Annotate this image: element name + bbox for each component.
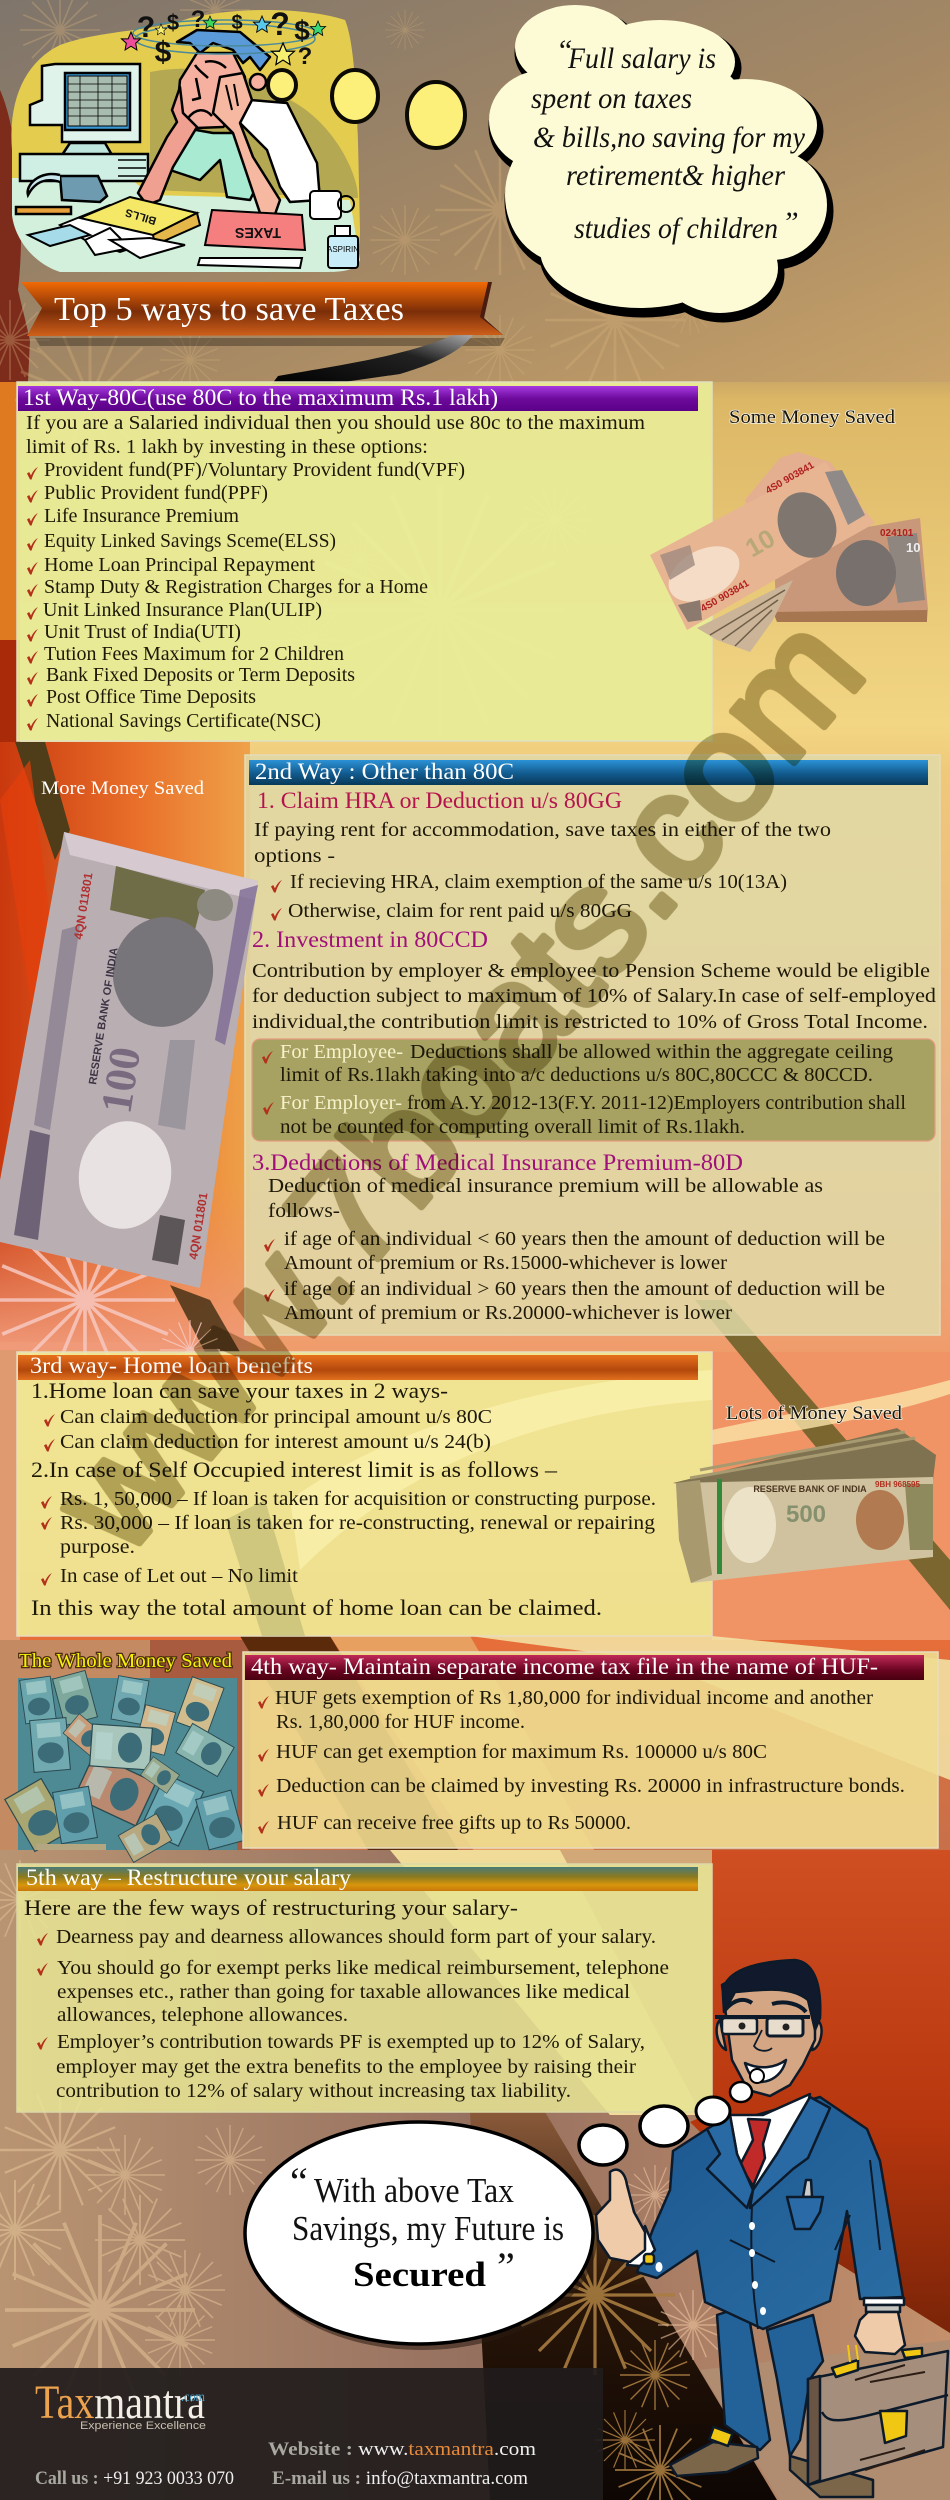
speech bubble: future is secured: Savings, my Future is (292, 2209, 564, 2248)
image: ten rupee notes: 4S0 903841 (764, 460, 817, 497)
head (717, 2020, 822, 2050)
thought cloud: spent on taxes (531, 82, 692, 115)
panel: 2nd way other than 80C: Contribution by employer & employee to Pension Scheme would be eligible (252, 960, 930, 982)
image: hundred rupee bundle: 4QN 011801 (71, 871, 96, 940)
panel: 4th way HUF: HUF can receive free gifts up to Rs 50000. (277, 1812, 631, 1834)
trousers (717, 2305, 770, 2450)
header: 4th way (245, 1655, 924, 1680)
jacket (637, 2097, 903, 2329)
title ribbon: Top 5 ways to save Taxes (54, 291, 404, 328)
speech bubble: future is secured: “ (290, 2159, 308, 2204)
panel: 1st way 80C: limit of Rs. 1 lakh by investing in these options: (26, 436, 428, 458)
thought cloud: retirement& higher (566, 159, 785, 192)
coffee mug (310, 191, 354, 219)
panel: 1st way 80C (17, 382, 712, 741)
panel: 5th way restructure salary: Here are the few ways of restructuring your salary- (24, 1895, 518, 1920)
callout: employee and employer limits (252, 1039, 935, 1141)
contact details: Call us : +91 923 0033 070 (35, 2468, 234, 2489)
logo: Taxmantra (35, 2376, 205, 2429)
taxes folder (198, 210, 305, 268)
dizzy stars and symbols: $ (167, 10, 179, 35)
bills folder: BILLS (124, 206, 158, 227)
panel: 2nd way other than 80C: 2nd Way : Other than 80C (255, 759, 514, 784)
header: 5th way (18, 1867, 698, 1891)
panel: 3rd way home loan: 2.In case of Self Occupied interest limit is as follows – (31, 1457, 558, 1482)
buttons (656, 2222, 766, 2315)
panel: 2nd way other than 80C: for deduction subject to maximum of 10% of Salary.In case of self-employed (252, 985, 936, 1007)
speech bubble: future is secured: Secured (353, 2255, 487, 2294)
panel: 1st way 80C: Unit Linked Insurance Plan(ULIP) (43, 599, 322, 621)
panel: 1st way 80C: Stamp Duty & Registration Charges for a Home (44, 576, 428, 598)
panel: 4th way HUF: Rs. 1,80,000 for HUF income. (276, 1711, 525, 1733)
speech bubbles: businessman (579, 2069, 764, 2165)
panel: 1st way 80C: National Savings Certificate(NSC) (46, 710, 321, 732)
panel: 2nd way other than 80C: 1. Claim HRA or Deduction u/s 80GG (257, 788, 622, 813)
watermark: www.7boats.com (19, 585, 895, 1582)
bills folder (28, 197, 200, 258)
title ribbon (21, 282, 505, 384)
computer monitor (16, 64, 148, 214)
panel: 2nd way other than 80C: Amount of premium or Rs.20000-whichever is lower (284, 1302, 732, 1324)
dizzy stars and symbols: ? (191, 6, 205, 33)
panel: 3rd way home loan: Can claim deduction for principal amount u/s 80C (60, 1406, 492, 1428)
aspirin bottle: ASPIRIN (327, 245, 359, 254)
panel: 5th way restructure salary: You should go for exempt perks like medical reimbursement, telephone (57, 1957, 669, 1979)
panel: 3rd way home loan: In this way the total amount of home loan can be claimed. (31, 1595, 602, 1620)
image: hundred rupee bundle: 100 (91, 1044, 150, 1117)
speech bubble: future is secured (245, 2122, 597, 2350)
contact details: E-mail us : info@taxmantra.com (272, 2468, 528, 2489)
thought bubbles: worried man (268, 70, 465, 148)
header: 3rd way (18, 1355, 698, 1380)
image: ten rupee notes: 10 (740, 523, 780, 563)
businessman illustration (596, 1960, 948, 2497)
speech bubble: future is secured: With above Tax (314, 2171, 514, 2210)
panel: 3rd way home loan: 3rd way- Home loan benefits (30, 1353, 313, 1378)
panel: 2nd way other than 80C: follows- (268, 1200, 340, 1222)
briefcase (808, 2351, 948, 2485)
panel: 5th way restructure salary: employer may get the extra benefits to the employee by raising their (56, 2056, 636, 2078)
header: 2nd way (249, 760, 928, 785)
caption: lots of money saved: Lots of Money Saved (726, 1403, 903, 1424)
dizzy stars and symbols (122, 6, 326, 70)
panel: 1st way 80C: 1st Way-80C(use 80C to the maximum Rs.1 lakh) (23, 385, 498, 410)
smile (745, 2060, 786, 2082)
panel: 2nd way other than 80C: options - (254, 845, 335, 867)
logo: .com (181, 2390, 205, 2405)
panel: 5th way restructure salary: allowances, telephone allowances. (57, 2004, 348, 2026)
shirt cuffs and watch (627, 2226, 655, 2266)
image: hundred rupee bundle (0, 832, 258, 1288)
panel: 4th way HUF (243, 1652, 938, 1848)
panel: 2nd way other than 80C: For Employee- (280, 1041, 403, 1063)
panel: 4th way HUF: HUF gets exemption of Rs 1,80,000 for individual income and another (275, 1687, 873, 1709)
panel: 3rd way home loan: Can claim deduction for interest amount u/s 24(b) (60, 1431, 491, 1453)
thought cloud: Full salary is (567, 42, 716, 75)
panel: 5th way restructure salary: expenses etc., rather than going for taxable allowances like medical (57, 1981, 630, 2003)
panel: 1st way 80C: Tution Fees Maximum for 2 Children (44, 643, 344, 665)
panel: 2nd way other than 80C: if age of an individual < 60 years then the amount of deduction will be (284, 1228, 885, 1250)
dizzy stars and symbols: ? (298, 43, 312, 70)
glasses (715, 2015, 810, 2019)
pocket and pen (803, 2180, 812, 2197)
panel: 5th way restructure salary: contribution to 12% of salary without increasing tax liability. (56, 2080, 571, 2102)
aspirin bottle (327, 226, 359, 268)
hair (723, 1960, 820, 2030)
panel: 1st way 80C: Bank Fixed Deposits or Term Deposits (46, 664, 355, 686)
panel: 2nd way other than 80C: from A.Y. 2012-13(F.Y. 2011-12)Employers contribution shall (407, 1092, 906, 1114)
panel: 3rd way home loan (17, 1352, 712, 1636)
panel: 1st way 80C: Public Provident fund(PPF) (44, 482, 268, 504)
shirt (730, 2094, 810, 2190)
image: hundred rupee bundle: RESERVE BANK OF INDIA (87, 947, 121, 1085)
nose (754, 2030, 772, 2051)
thought cloud: ” (782, 206, 799, 239)
image: ten rupee notes: 024101 (880, 528, 914, 539)
panel: 5th way restructure salary: Employer’s contribution towards PF is exempted up to 12% of Salary, (57, 2031, 645, 2053)
panel: 2nd way other than 80C (245, 755, 940, 1335)
panel: 2nd way other than 80C: Deduction of medical insurance premium will be allowable as (268, 1175, 823, 1197)
contact details (35, 2439, 536, 2489)
panel: 2nd way other than 80C: Otherwise, claim for rent paid u/s 80GG (288, 900, 632, 922)
dizzy stars and symbols: ? (270, 6, 290, 42)
panel: 3rd way home loan: In case of Let out – No limit (60, 1565, 298, 1587)
image: ten rupee notes: 10 (906, 540, 920, 555)
caption: some money saved: Some Money Saved (729, 407, 896, 428)
worried person (138, 30, 320, 220)
image: five hundred rupee bundle: 9BH 968595 (875, 1480, 920, 1489)
panel: 1st way 80C: Equity Linked Savings Sceme(ELSS) (44, 530, 336, 552)
footer band (0, 2368, 603, 2500)
thought cloud (489, 5, 830, 319)
panel: 2nd way other than 80C: 3.Deductions of Medical Insurance Premium-80D (252, 1150, 743, 1175)
panel: 4th way HUF: HUF can get exemption for maximum Rs. 100000 u/s 80C (276, 1741, 767, 1763)
panel: 1st way 80C: Provident fund(PF)/Voluntary Provident fund(VPF) (44, 459, 465, 481)
contact details: Website : www. taxmantra .com (268, 2439, 536, 2460)
image: pile of banknotes (5, 1670, 244, 1862)
dizzy stars and symbols: ? (137, 11, 155, 44)
speech bubble: future is secured: ” (497, 2244, 515, 2289)
panel: 2nd way other than 80C: not be counted for computing overall limit of Rs.1lakh. (280, 1116, 745, 1138)
panel: 4th way HUF: 4th way- Maintain separate income tax file in the name of HUF- (251, 1654, 878, 1679)
thought cloud: “ (556, 34, 573, 67)
panel: 2nd way other than 80C: if age of an individual > 60 years then the amount of deduction will be (284, 1278, 885, 1300)
logo: Experience Excellence (80, 2420, 206, 2432)
panel: 2nd way other than 80C: 2. Investment in 80CCD (252, 927, 488, 952)
panel: 1st way 80C: Post Office Time Deposits (46, 686, 256, 708)
dizzy stars and symbols: $ (231, 12, 243, 34)
panel: 3rd way home loan: purpose. (60, 1536, 135, 1558)
panel: 5th way restructure salary: 5th way – Restructure your salary (26, 1865, 352, 1890)
cartoon: stressed man with bills and taxes (11, 6, 360, 272)
image: ten rupee notes: 4S0 903841 (699, 578, 752, 615)
panel: 1st way 80C: If you are a Salaried individual then you should use 80c to the maximum (26, 412, 645, 434)
caption: the whole money saved: The Whole Money Saved (19, 1650, 232, 1672)
panel: 2nd way other than 80C: limit of Rs.1lakh taking into a/c deductions u/s 80C,80CCC & 80CCD. (280, 1064, 873, 1086)
thought cloud: & bills,no saving for my (533, 121, 806, 154)
hand with thumb up (596, 2170, 645, 2262)
image: five hundred rupee bundle: 500 (786, 1501, 826, 1528)
taxes folder: TAXES (235, 224, 281, 241)
panel: 2nd way other than 80C: Amount of premium or Rs.15000-whichever is lower (284, 1252, 727, 1274)
panel: 2nd way other than 80C: If recieving HRA, claim exemption of the same u/s 10(13A) (290, 871, 787, 893)
lapels (707, 2115, 753, 2208)
dizzy stars and symbols: $ (294, 15, 310, 46)
panel: 1st way 80C: Unit Trust of India(UTI) (44, 621, 241, 643)
shoes (670, 2442, 758, 2476)
panel: 3rd way home loan: 1.Home loan can save your taxes in 2 ways- (31, 1378, 448, 1403)
thought cloud: studies of children (574, 212, 778, 245)
header: 1st way (18, 386, 698, 411)
image: ten rupee notes (650, 452, 928, 652)
caption: more money saved: More Money Saved (41, 778, 205, 799)
eyebrows (725, 2000, 806, 2012)
panel: 2nd way other than 80C: Deductions shall be allowed within the aggregate ceiling (410, 1041, 893, 1063)
dizzy stars and symbols: $ (155, 36, 172, 69)
panel: 2nd way other than 80C: individual,the contribution limit is restricted to 10% of Gross Total Income. (252, 1011, 928, 1033)
image: five hundred rupee bundle (673, 1428, 936, 1583)
panel: 2nd way other than 80C: For Employer- (280, 1092, 402, 1114)
panel: 3rd way home loan: Rs. 30,000 – If loan is taken for re-constructing, renewal or repairing (60, 1512, 655, 1534)
image: hundred rupee bundle: 4QN 011801 (186, 1191, 211, 1260)
panel: 3rd way home loan: Rs. 1, 50,000 – If loan is taken for acquisition or constructing purpose. (60, 1488, 656, 1510)
panel: 5th way restructure salary: Dearness pay and dearness allowances should form part of your salary. (56, 1926, 656, 1948)
panel: 2nd way other than 80C: If paying rent for accommodation, save taxes in either of the two (254, 819, 831, 841)
panel: 4th way HUF: Deduction can be claimed by investing Rs. 20000 in infrastructure bonds. (276, 1775, 905, 1797)
image: five hundred rupee bundle: RESERVE BANK OF INDIA (753, 1484, 867, 1494)
hand holding case (855, 2312, 905, 2354)
panel: 5th way restructure salary (17, 1864, 712, 2112)
necktie (740, 2119, 770, 2186)
panel: 1st way 80C: Home Loan Principal Repayment (44, 554, 315, 576)
panel: 1st way 80C: Life Insurance Premium (44, 505, 239, 527)
